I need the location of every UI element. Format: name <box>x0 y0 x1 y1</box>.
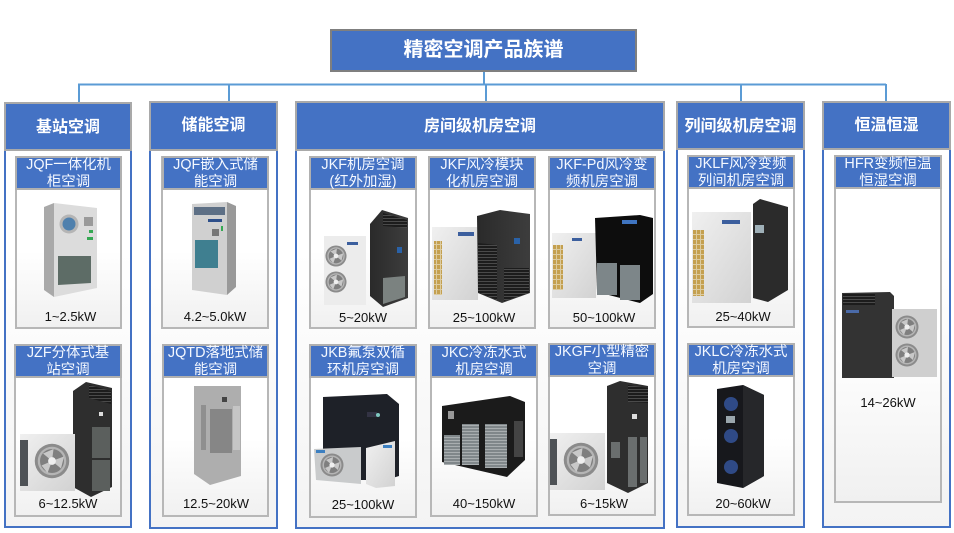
card title <box>834 155 942 189</box>
card title <box>309 156 417 190</box>
capacity label: 25~100kW <box>453 310 515 325</box>
capacity label: 5~20kW <box>339 310 387 325</box>
card title: 环机房空调 <box>327 362 399 378</box>
heading: 基站空调 <box>4 102 132 151</box>
capacity label: 25~100kW <box>332 497 394 512</box>
card: JKC冷冻水式机房空调 <box>430 344 538 517</box>
card title: 恒湿空调 <box>859 173 917 189</box>
product image: JKF modular unit <box>432 210 530 303</box>
card title: 列间机房空调 <box>698 173 784 189</box>
product image: JQF cabinet unit <box>44 203 97 297</box>
card title <box>548 156 656 190</box>
card: HFR变频恒温恒湿空调 <box>834 155 942 503</box>
product image: JKLF in-row unit <box>692 199 788 303</box>
card title: 化机房空调 <box>446 174 518 190</box>
card title <box>428 156 536 190</box>
heading: 列间级机房空调 <box>676 101 805 150</box>
product image: JKGF compact unit <box>550 381 648 493</box>
card title: 能空调 <box>194 174 237 190</box>
product image: HFR constant temperature unit <box>842 292 937 378</box>
card title: JKF机房空调 <box>321 157 405 173</box>
card title: JQTD落地式储 <box>168 345 263 361</box>
card title: 机房空调 <box>712 361 770 377</box>
card title <box>687 343 795 377</box>
product image: JKB fluorine pump unit <box>314 394 399 488</box>
card: JKB氟泵双循环机房空调 <box>309 344 417 518</box>
card title: JKF-Pd风冷变 <box>556 157 648 173</box>
capacity label: 20~60kW <box>715 496 771 511</box>
product image: JKF-Pd inverter unit <box>552 215 653 303</box>
card: JKLC冷冻水式机房空调 <box>687 343 795 516</box>
card title <box>430 344 538 378</box>
card: JKF-Pd风冷变频机房空调 <box>548 156 656 329</box>
card: JKLF风冷变频列间机房空调 <box>687 155 795 328</box>
product image: JZF split unit <box>20 382 112 497</box>
card title: 站空调 <box>46 362 90 378</box>
product image: JQTD floor unit <box>194 386 241 485</box>
card title: 能空调 <box>194 362 237 378</box>
card title <box>548 343 656 377</box>
card: JKGF小型精密空调 <box>548 343 656 516</box>
card title: JQF嵌入式储 <box>173 157 258 173</box>
capacity label: 6~15kW <box>580 496 628 511</box>
card title: JKLC冷冻水式 <box>695 344 787 360</box>
card title: (红外加湿) <box>329 174 397 190</box>
card title: HFR变频恒温 <box>844 156 932 172</box>
panel: 恒温恒湿 <box>822 101 951 528</box>
card title <box>15 156 122 190</box>
title <box>330 29 637 72</box>
card title: JKGF小型精密 <box>555 344 649 360</box>
card title <box>162 156 269 190</box>
panel: 储能空调 <box>149 101 278 529</box>
capacity label: 6~12.5kW <box>39 496 97 511</box>
heading: 恒温恒湿: 恒温恒湿 <box>854 117 918 134</box>
card: JQF一体化机柜空调 <box>15 156 122 329</box>
heading: 房间级机房空调 <box>295 101 665 151</box>
card: JKF机房空调(红外加湿) <box>309 156 417 329</box>
capacity label: 12.5~20kW <box>183 496 249 511</box>
product image: JKC chilled water unit <box>442 396 525 477</box>
capacity label: 25~40kW <box>715 309 771 324</box>
card title: 频机房空调 <box>566 174 638 190</box>
panel: 房间级机房空调 <box>295 101 665 529</box>
card title: 柜空调 <box>47 174 90 190</box>
heading: 恒温恒湿 <box>822 101 951 150</box>
card: JKF风冷模块化机房空调 <box>428 156 536 329</box>
card: JQTD落地式储能空调 <box>162 344 269 517</box>
card: JQF嵌入式储能空调 <box>161 156 269 329</box>
panel: 列间级机房空调 <box>676 101 805 528</box>
capacity label: 1~2.5kW <box>45 309 96 324</box>
card: JZF分体式基站空调 <box>14 344 122 517</box>
heading: 储能空调 <box>149 101 278 151</box>
panel: 基站空调 <box>4 102 132 528</box>
card title <box>309 344 417 378</box>
heading: 储能空调: 储能空调 <box>181 117 246 134</box>
title: 精密空调产品族谱 <box>404 39 564 61</box>
capacity label: 4.2~5.0kW <box>184 309 246 324</box>
card title: JKF风冷模块 <box>440 157 524 173</box>
card title: JZF分体式基 <box>27 345 109 361</box>
heading: 基站空调: 基站空调 <box>36 119 100 136</box>
heading: 列间级机房空调: 列间级机房空调 <box>684 118 796 135</box>
capacity label: 14~26kW <box>860 395 916 410</box>
product image: JQF embedded unit <box>192 202 236 295</box>
card title: JKB氟泵双循 <box>321 345 405 361</box>
product image: JKF room unit <box>324 210 408 307</box>
capacity label: 50~100kW <box>573 310 635 325</box>
card title: 空调 <box>588 361 616 377</box>
capacity label: 40~150kW <box>453 496 515 511</box>
card title <box>687 155 795 189</box>
connector lines <box>78 72 887 102</box>
product image: JKLC chilled water in-row unit <box>717 385 764 488</box>
card title: 机房空调 <box>455 362 513 378</box>
card title <box>14 344 122 378</box>
card title: JQF一体化机 <box>26 157 111 173</box>
heading: 房间级机房空调: 房间级机房空调 <box>424 118 536 135</box>
card title <box>162 344 269 378</box>
card title: JKC冷冻水式 <box>442 345 526 361</box>
card title: JKLF风冷变频 <box>695 156 787 172</box>
